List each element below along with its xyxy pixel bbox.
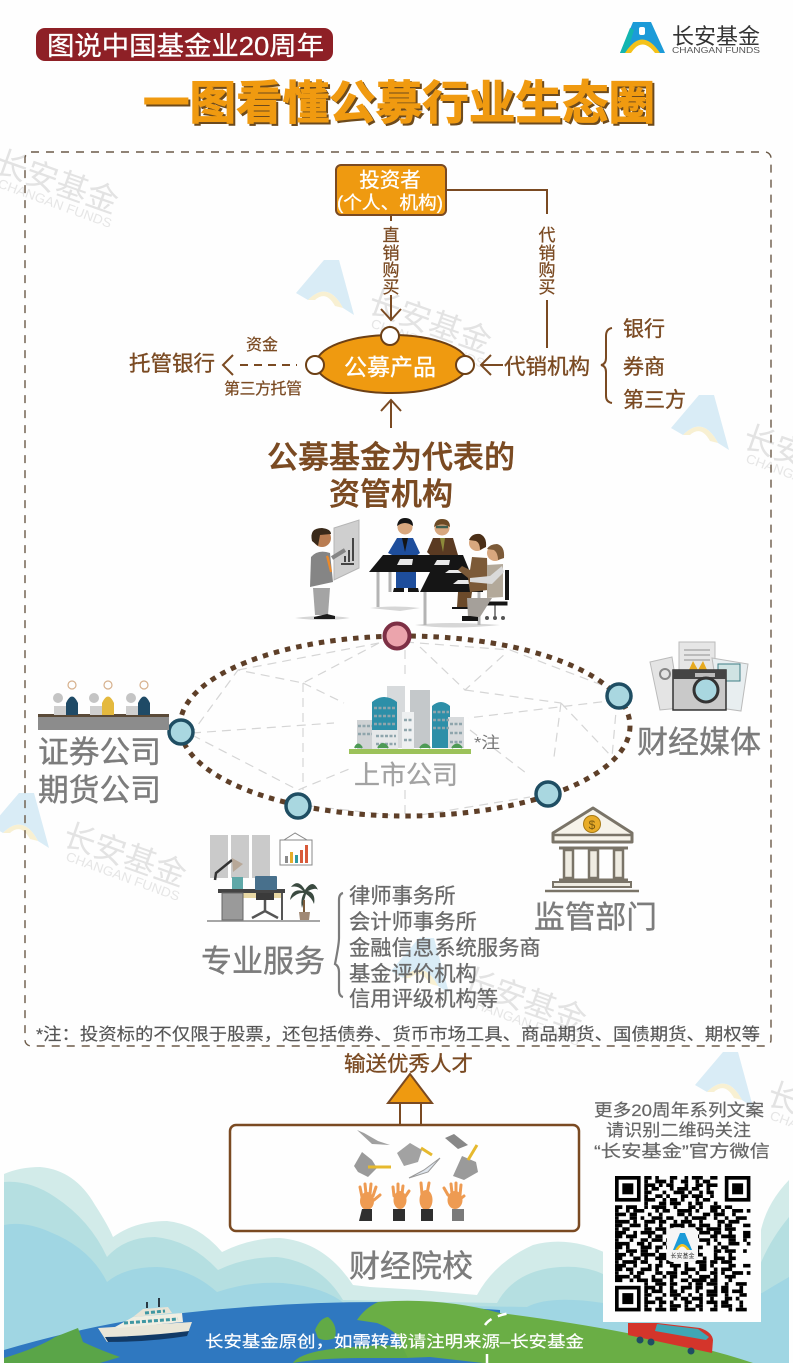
QR code: 长安基金 (670, 1252, 695, 1260)
icon: presenter (310, 528, 345, 619)
icon: camera and documents (650, 642, 748, 711)
icon: flying caps and books (354, 1130, 478, 1180)
text: follow prompt: 请识别二维码关注 (606, 1121, 751, 1140)
logo: Changan Funds: 长安基金 (672, 24, 760, 49)
watermark upper centre: CHANGAN FUNDS (369, 316, 487, 371)
icon: ship (98, 1298, 192, 1342)
text: follow prompt (594, 1101, 770, 1161)
icon: side attendee two with chair (462, 544, 509, 621)
service list (335, 884, 541, 1011)
icon: raised hands (359, 1183, 464, 1221)
investor box: (个人、机构) (337, 193, 443, 213)
icon: side attendee one (452, 534, 488, 609)
watermark left: CHANGAN FUNDS (64, 849, 182, 904)
panel: ecosystem dashed frame (25, 152, 771, 1046)
heading: asset management institutions: 公募基金为代表的 (267, 440, 515, 475)
icon: traders desk (38, 681, 169, 730)
arrow: agency purchase: 销 (538, 244, 556, 263)
service list: 信用评级机构等 (349, 987, 498, 1011)
globe land: right continent (357, 1301, 753, 1363)
hills back layer (4, 1167, 789, 1363)
title: 一图看懂公募行业生态圈 (143, 77, 655, 129)
watermark left: 长安基金 (59, 817, 191, 893)
label: talent supply: 输送优秀人才 (344, 1053, 473, 1076)
arrow: direct purchase: 买 (382, 278, 400, 297)
heading: asset management institutions: 资管机构 (329, 477, 453, 512)
route dashes (485, 1313, 511, 1363)
panel: finance schools (230, 1125, 579, 1231)
arrow: agency purchase: 买 (538, 278, 556, 297)
custodian bank flow: 资金 (246, 336, 278, 354)
badge: series heading: 图说中国基金业20周年 (47, 31, 324, 61)
investor box (336, 165, 446, 215)
scenery: hills and globe (4, 1167, 789, 1363)
globe land: islands (293, 1317, 408, 1363)
distribution agencies (481, 318, 686, 412)
text: follow prompt: 更多20周年系列文案 (594, 1101, 764, 1120)
icon: meeting illustration (295, 518, 509, 628)
distribution agencies: 券商 (623, 356, 665, 379)
service list: 会计师事务所 (349, 910, 477, 934)
ring nodes (169, 624, 631, 818)
arrow: direct purchase (381, 216, 401, 320)
arrow: direct purchase: 购 (382, 261, 400, 280)
label: listed companies: 上市公司 (354, 760, 458, 790)
arrow: agency purchase (447, 190, 556, 348)
network background lines (192, 642, 617, 815)
icon: glasses attendee (427, 519, 458, 557)
watermark right (671, 395, 793, 506)
icon: blue suit attendee (388, 518, 420, 592)
icon: listed company buildings (349, 686, 471, 754)
arrow: direct purchase: 直 (382, 226, 400, 245)
icon: presentation board (334, 520, 359, 580)
right and left page margins (0, 1160, 793, 1363)
service list: 律师事务所 (349, 884, 456, 908)
hills middle layer (4, 1182, 789, 1363)
label: note marker: *注 (474, 734, 500, 752)
logo: Changan Funds: CHANGAN FUNDS (672, 45, 760, 55)
footnote: *注：投资标的不仅限于股票，还包括债券、货币市场工具、商品期货、国债期货、期权等 (36, 1025, 760, 1044)
watermark left (0, 793, 191, 904)
ring: ecosystem dotted ellipse (180, 636, 630, 816)
footer credit: 长安基金原创，如需转载请注明来源–长安基金 (205, 1333, 584, 1351)
label: regulators: 监管部门 (534, 900, 657, 935)
label: securities and futures: 期货公司 (38, 773, 161, 808)
hills front layer (4, 1224, 789, 1363)
distribution agencies: 代销机构 (504, 355, 590, 379)
custodian bank flow: 第三方托管 (224, 380, 302, 398)
label: finance schools: 财经院校 (349, 1249, 473, 1284)
watermark upper centre (296, 260, 496, 371)
watermark lower right (695, 1052, 793, 1163)
icon: office desk (207, 833, 320, 921)
QR code (603, 1165, 761, 1322)
watermark upper centre: 长安基金 (364, 284, 496, 360)
service list: 金融信息系统服务商 (349, 936, 541, 960)
label: securities and futures (38, 735, 161, 808)
distribution agencies: 银行 (623, 318, 665, 341)
investor box: 投资者 (359, 169, 421, 192)
label: professional services: 专业服务 (201, 944, 325, 979)
arrow: direct purchase: 销 (382, 244, 400, 263)
public fund product node (306, 327, 474, 393)
watermark lower centre (391, 938, 591, 1049)
arrow: schools to industry (388, 1074, 432, 1125)
arrow: asset managers to product (381, 400, 401, 428)
globe ocean (4, 1302, 500, 1363)
watermarks (0, 144, 793, 1163)
icon: regulator bank building (545, 808, 639, 891)
icon: red bus (628, 1323, 713, 1354)
logo: Changan Funds (620, 22, 760, 55)
custodian bank flow: 托管银行 (129, 352, 215, 376)
globe land: left (4, 1328, 120, 1363)
icon: logo A (620, 22, 665, 53)
watermark lower centre: 长安基金 (459, 962, 591, 1038)
watermark lower centre: CHANGAN FUNDS (464, 994, 582, 1049)
text: follow prompt: “长安基金”官方微信 (594, 1142, 770, 1161)
distribution agencies: 第三方 (623, 389, 686, 412)
heading: asset management institutions (267, 440, 515, 512)
public fund product node: 公募产品 (344, 354, 436, 380)
custodian bank flow (129, 336, 302, 398)
arrow: agency purchase: 代 (538, 226, 556, 245)
arrow: agency purchase: 购 (538, 261, 556, 280)
service list: 基金评价机构 (349, 962, 477, 986)
label: financial media: 财经媒体 (637, 725, 761, 760)
icon: regulator bank building: $ (589, 818, 596, 832)
icon: tables (369, 555, 483, 625)
label: securities and futures: 证券公司 (38, 735, 161, 770)
